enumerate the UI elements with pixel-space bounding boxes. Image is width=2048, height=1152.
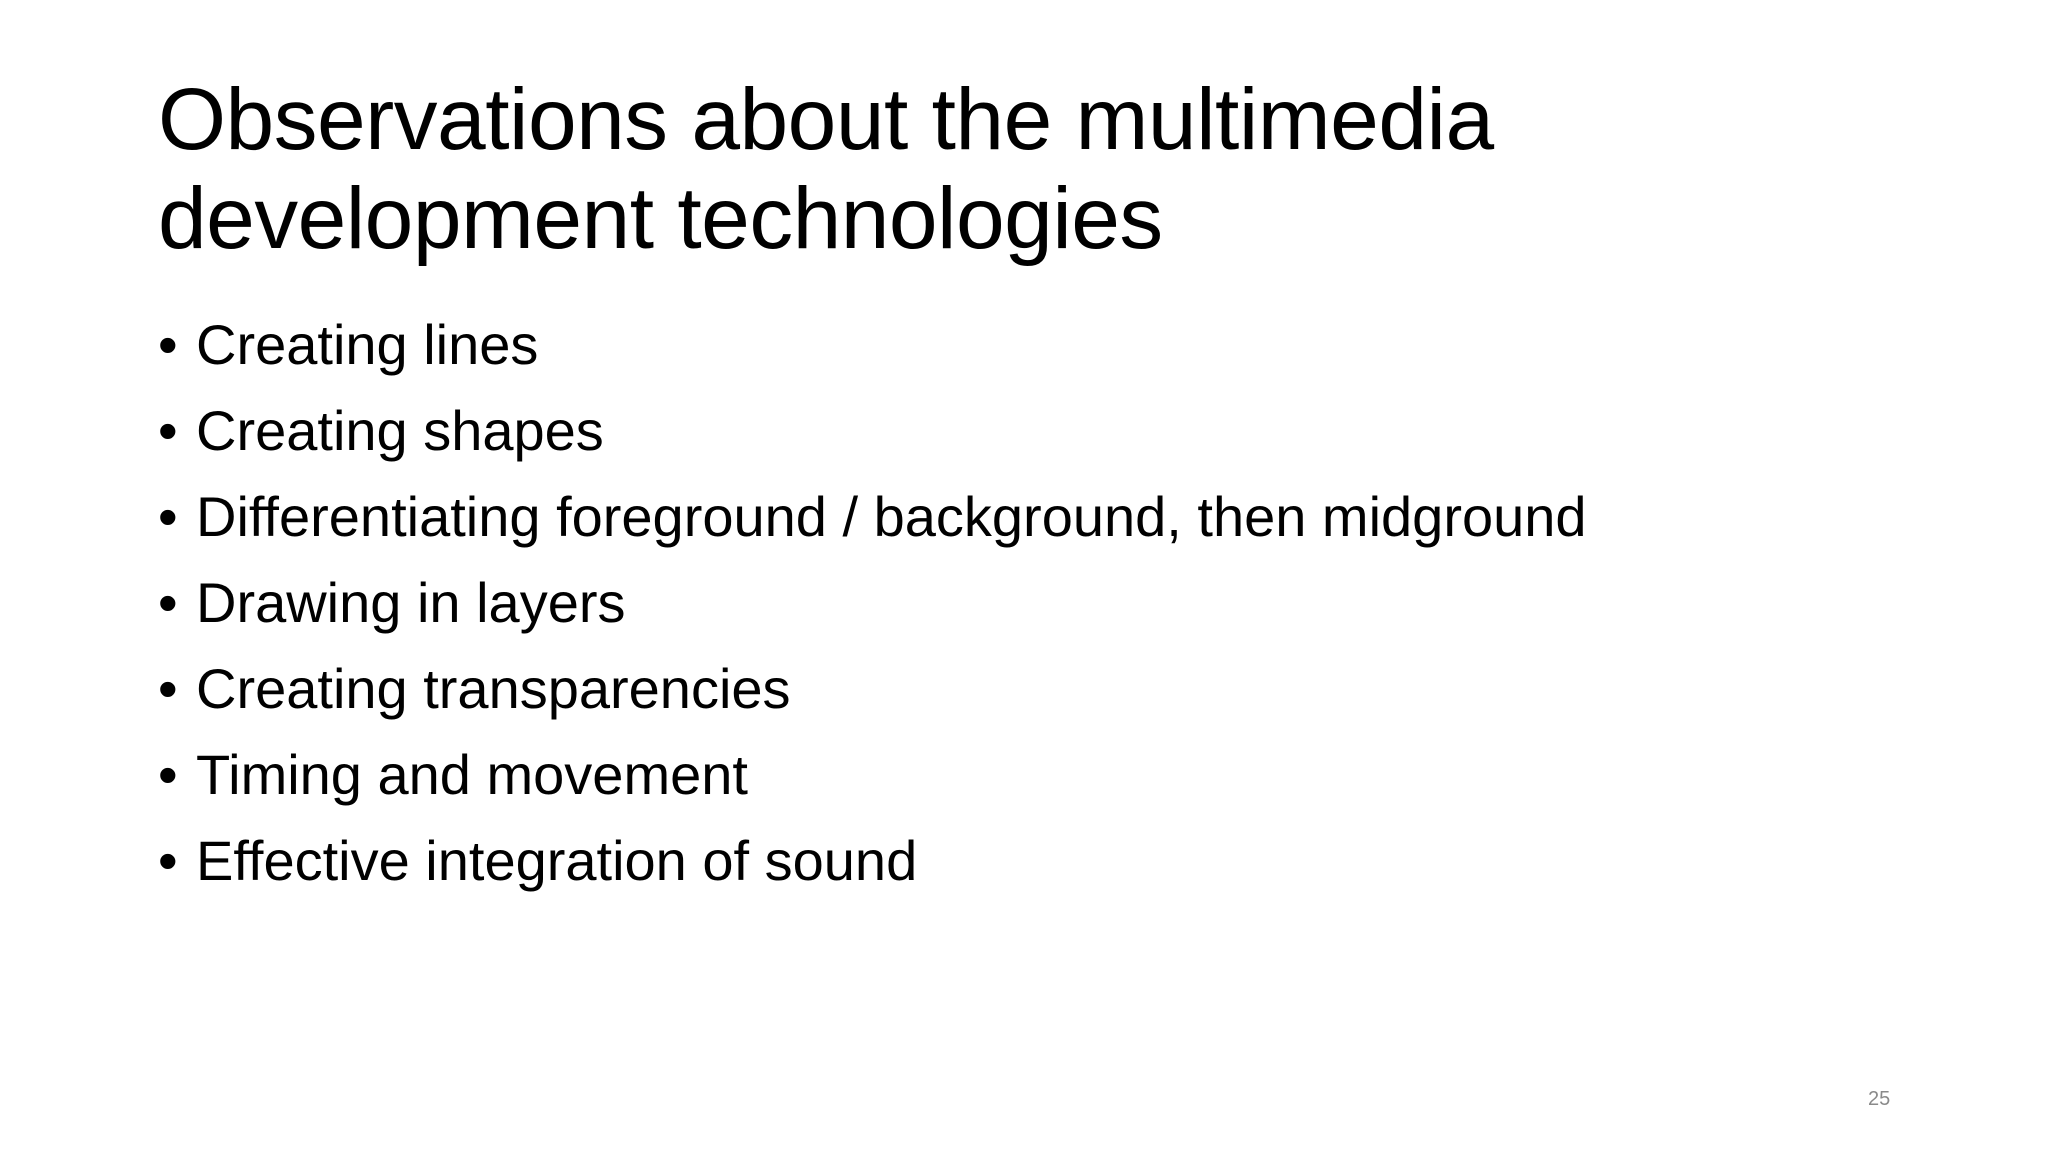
bullet list <box>160 313 1587 892</box>
page number: 25 <box>1868 1088 1890 1110</box>
bullet: timing: Timing and movement <box>196 743 748 806</box>
title: development technologies <box>158 169 1163 267</box>
bullet: sound: Effective integration of sound <box>196 829 917 892</box>
title <box>158 70 1494 267</box>
bullet: creating shapes: Creating shapes <box>196 399 604 462</box>
bullet: creating lines: Creating lines <box>196 313 538 376</box>
bullet: differentiating: Differentiating foreground / background, then midground <box>196 485 1587 548</box>
bullet: layers: Drawing in layers <box>196 571 626 634</box>
title: Observations about the multimedia <box>158 70 1494 168</box>
bullet: transparencies: Creating transparencies <box>196 657 791 720</box>
